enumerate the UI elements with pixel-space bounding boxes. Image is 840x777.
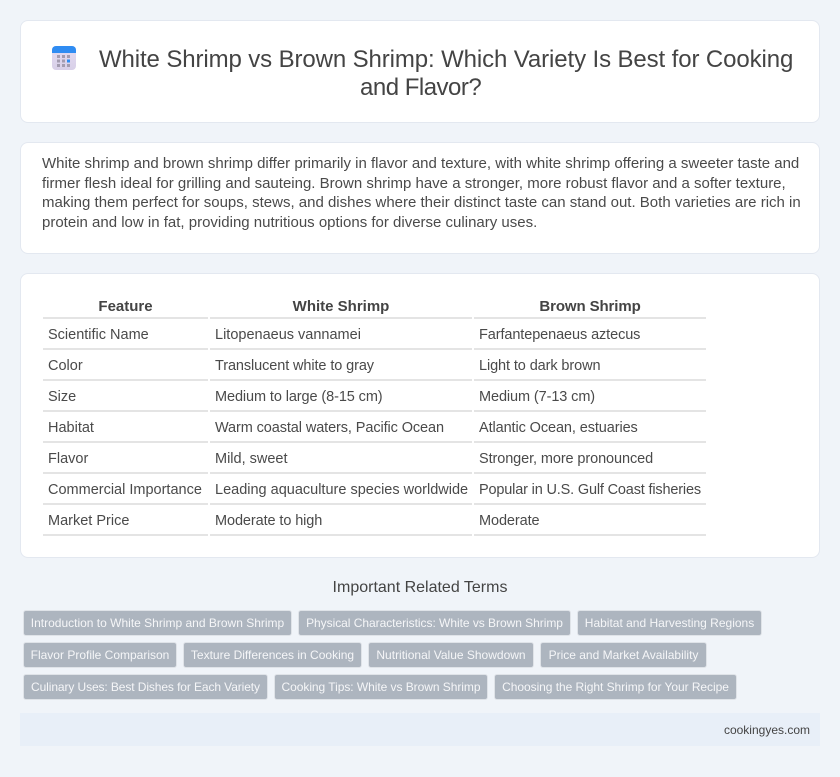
table header: Brown Shrimp: [539, 298, 641, 315]
panel: summary card: [20, 142, 820, 254]
row: commercial importance: Leading aquaculture species worldwide: [215, 482, 468, 498]
row: market price: [43, 513, 706, 536]
tag: Culinary Uses: Best Dishes for Each Variety: [31, 680, 260, 694]
footer bar: [20, 713, 820, 746]
tag: [540, 642, 707, 668]
tag: [298, 610, 571, 636]
tag: Choosing the Right Shrimp for Your Recipe: [502, 680, 729, 694]
row: market price: Moderate: [479, 513, 539, 529]
row: flavor: Mild, sweet: [215, 451, 288, 467]
row: size: Medium (7-13 cm): [479, 389, 595, 405]
row: habitat: Habitat: [48, 420, 94, 436]
tag: Physical Characteristics: White vs Brown Shrimp: [306, 616, 563, 630]
row: market price: Market Price: [48, 513, 129, 529]
tag: [274, 674, 488, 700]
row: color: Light to dark brown: [479, 358, 600, 374]
row: flavor: Stronger, more pronounced: [479, 451, 653, 467]
related terms tags: [23, 610, 762, 700]
row: commercial importance: Popular in U.S. Gulf Coast fisheries: [479, 482, 701, 498]
row: habitat: Warm coastal waters, Pacific Ocean: [215, 420, 444, 436]
tag: Habitat and Harvesting Regions: [585, 616, 754, 630]
tag: Price and Market Availability: [549, 648, 698, 662]
summary text: [42, 155, 801, 230]
table header: [43, 298, 706, 319]
icon: calendar: [52, 46, 76, 70]
row: scientific name: Litopenaeus vannamei: [215, 327, 361, 343]
tag: [368, 642, 534, 668]
panel: comparison table card: [20, 273, 820, 558]
row: market price: Moderate to high: [215, 513, 322, 529]
heading: important related terms: Important Related Terms: [333, 579, 507, 596]
table header: Feature: [98, 298, 153, 315]
row: size: [43, 389, 706, 412]
summary text: protein and low in fat, providing nutritious options for diverse culinary uses.: [42, 214, 537, 230]
row: flavor: [43, 451, 706, 474]
title: and Flavor?: [360, 74, 481, 101]
row: scientific name: [43, 327, 706, 350]
tag: [23, 674, 268, 700]
tag: [577, 610, 762, 636]
row: color: [43, 358, 706, 381]
tag: Nutritional Value Showdown: [376, 648, 526, 662]
row: size: Size: [48, 389, 76, 405]
tag: Flavor Profile Comparison: [31, 648, 169, 662]
row: size: Medium to large (8-15 cm): [215, 389, 383, 405]
tag: [23, 610, 292, 636]
tag: [23, 642, 177, 668]
row: commercial importance: [43, 482, 706, 505]
row: habitat: Atlantic Ocean, estuaries: [479, 420, 638, 436]
row: color: Translucent white to gray: [215, 358, 374, 374]
tag: Texture Differences in Cooking: [191, 648, 354, 662]
row: scientific name: Farfantepenaeus aztecus: [479, 327, 640, 343]
tag: Cooking Tips: White vs Brown Shrimp: [282, 680, 480, 694]
tag: [494, 674, 737, 700]
summary text: firmer flesh ideal for grilling and sauteing. Brown shrimp have a stronger, more robust flavor and a softer texture,: [42, 174, 786, 192]
tag: [183, 642, 362, 668]
row: flavor: Flavor: [48, 451, 88, 467]
summary text: White shrimp and brown shrimp differ primarily in flavor and texture, with white shrimp offering a sweeter taste and: [42, 155, 799, 172]
row: scientific name: Scientific Name: [48, 327, 149, 343]
table header: White Shrimp: [293, 298, 389, 315]
title: [99, 46, 793, 101]
footer text: cookingyes.com: [724, 723, 810, 737]
tag: Introduction to White Shrimp and Brown Shrimp: [31, 616, 284, 630]
row: color: Color: [48, 358, 83, 374]
row: commercial importance: Commercial Importance: [48, 482, 202, 498]
row: habitat: [43, 420, 706, 443]
panel: title card: [20, 20, 820, 123]
summary text: making them perfect for soups, stews, and dishes where their distinct taste can stand out. Both varieties are rich in: [42, 194, 801, 211]
title: White Shrimp vs Brown Shrimp: Which Variety Is Best for Cooking: [99, 46, 793, 73]
